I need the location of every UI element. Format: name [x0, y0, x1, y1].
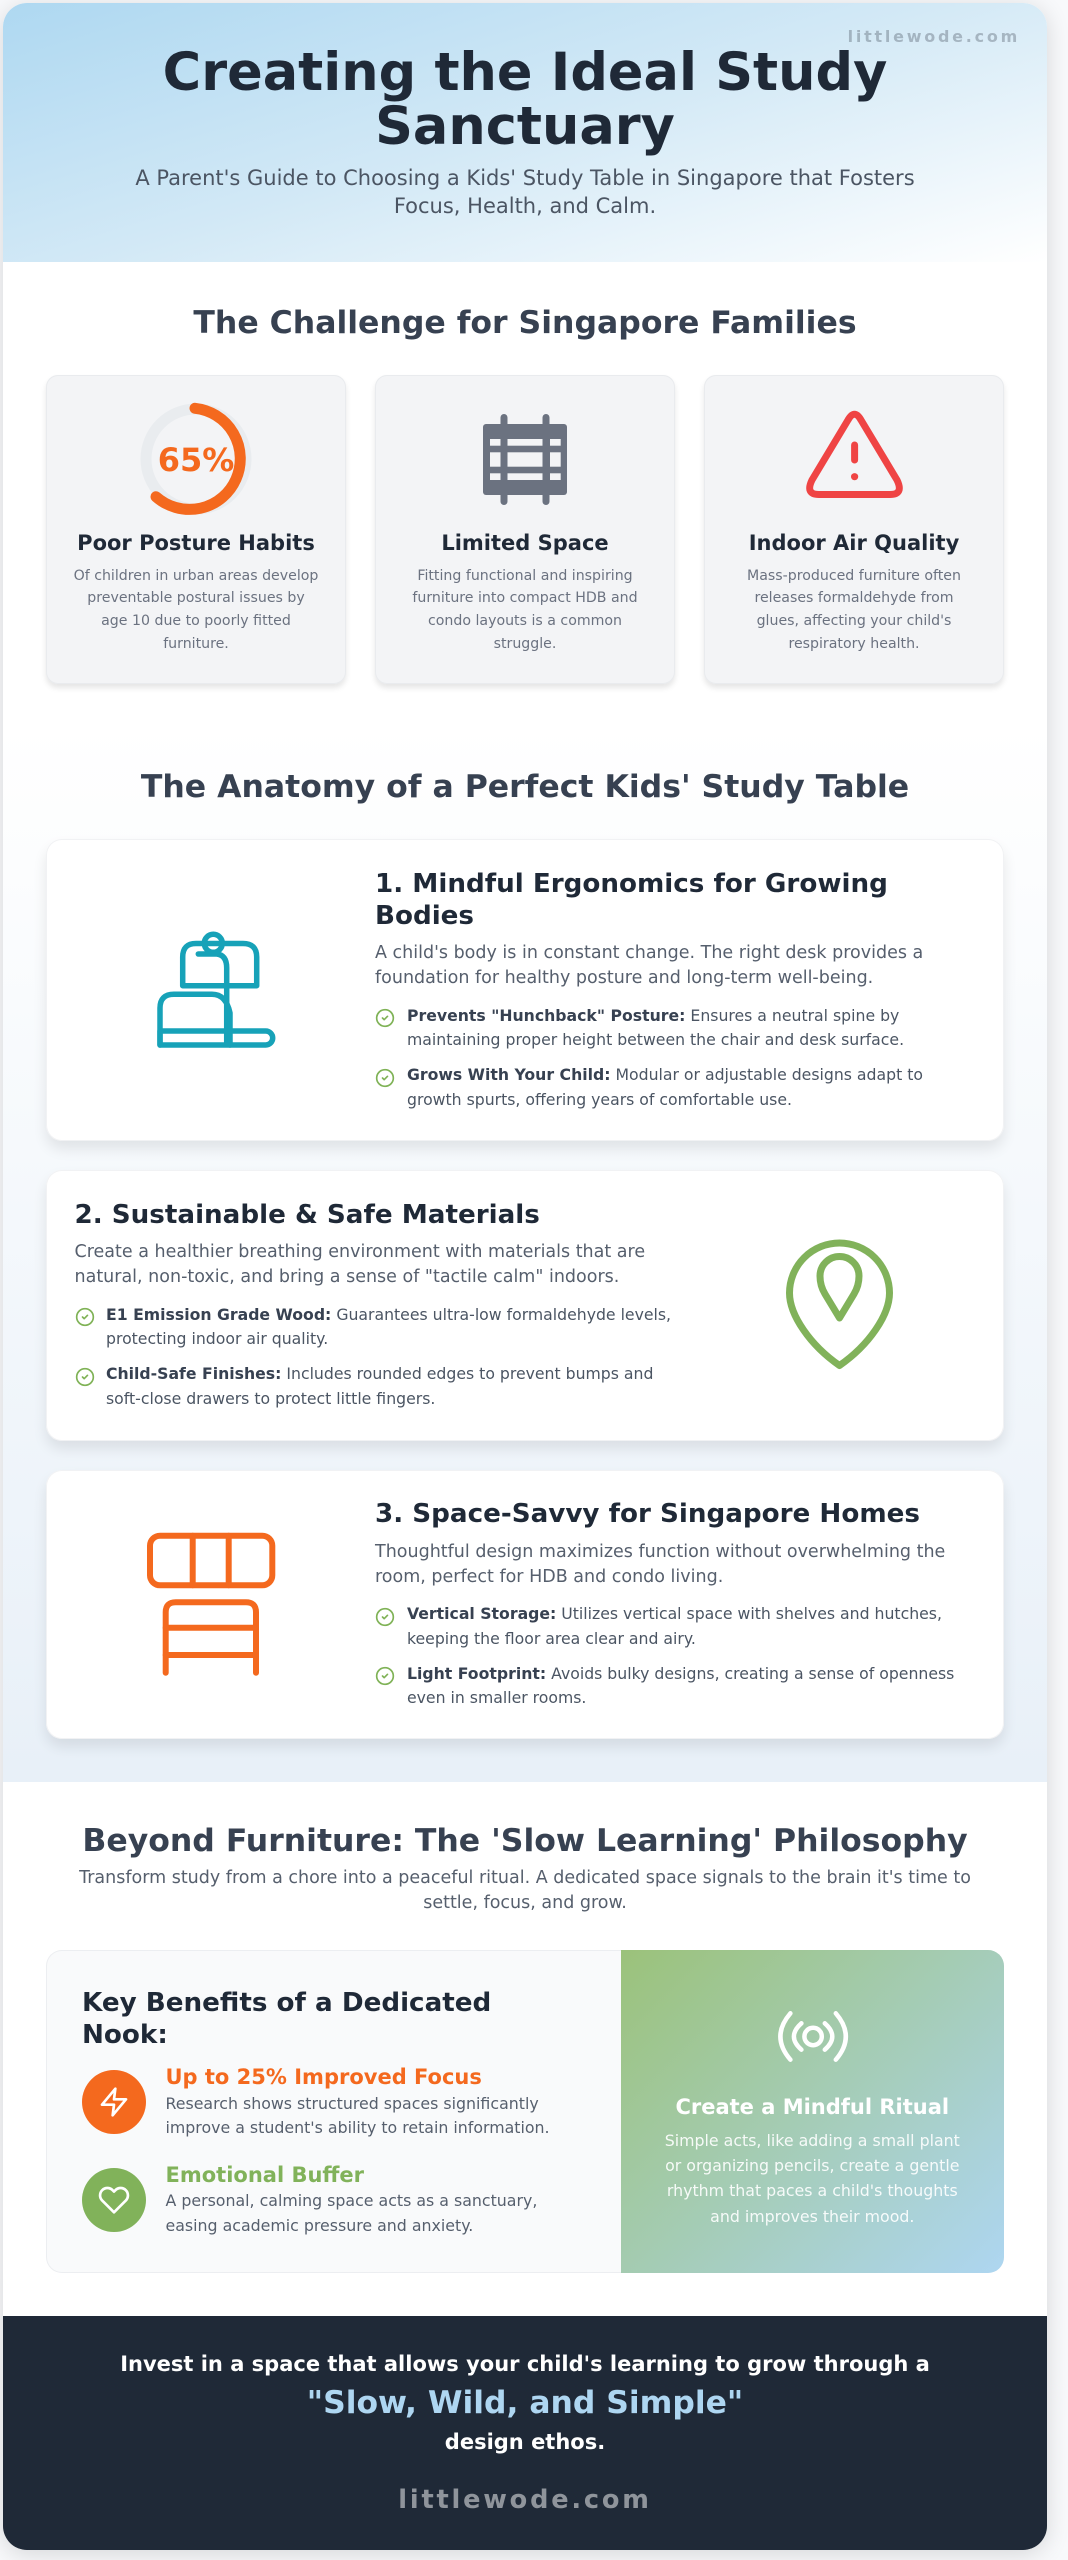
- feature title: 1. Mindful Ergonomics for Growing: [375, 868, 888, 898]
- subtitle: Focus, Health, and Calm.: [394, 194, 656, 218]
- card text: age 10 due to poorly fitted: [101, 613, 291, 629]
- benefit title: emotional buffer: Emotional Buffer: [166, 2162, 364, 2186]
- bullet: child-safe finishes: soft-close drawers to protect little fingers.: [106, 1389, 435, 1408]
- title: [163, 42, 887, 156]
- panel: poor posture habits: [46, 375, 346, 684]
- icon: check: [376, 1666, 394, 1686]
- card text: [747, 568, 961, 652]
- section: the challenge: [3, 262, 1047, 724]
- ritual text: Simple acts, like adding a small plant: [665, 2131, 960, 2150]
- panel: indoor air quality: [704, 375, 1004, 684]
- icon: check: [76, 1368, 94, 1386]
- card title: Poor Posture Habits: [77, 531, 315, 555]
- footer banner: [3, 2316, 1047, 2550]
- card title: Limited Space: [441, 531, 609, 555]
- icon: lightning bolt: [82, 2070, 146, 2134]
- heading: anatomy: The Anatomy of a Perfect Kids' Study Table: [141, 769, 909, 805]
- header banner: [3, 3, 1047, 262]
- heading: key benefits: Key Benefits of a Dedicated: [82, 1988, 491, 2018]
- bullet: grows with child: [407, 1065, 923, 1109]
- icon: check: [376, 1608, 394, 1626]
- bullet: light footprint: Light Footprint: Avoids bulky designs, creating a sense of openness: [407, 1664, 954, 1683]
- feature title: 3. Space-Savvy for Singapore Homes: [375, 1499, 920, 1529]
- panel: limited space: [375, 375, 675, 684]
- footer line two: design ethos.: [445, 2430, 605, 2454]
- intro text: [79, 1868, 971, 1912]
- card text: furniture into compact HDB and: [412, 590, 638, 606]
- ritual text: or organizing pencils, create a gentle: [665, 2156, 959, 2175]
- card text: glues, affecting your child's: [757, 613, 951, 629]
- intro text: Transform study from a chore into a peaceful ritual. A dedicated space signals to the brain it's time to: [79, 1868, 971, 1888]
- icon: desk and chair: [157, 932, 276, 1048]
- bullet: E1 wood: E1 Emission Grade Wood: Guarantees ultra-low formaldehyde levels,: [106, 1305, 671, 1324]
- icon: check: [376, 1008, 394, 1028]
- panel: benefits and ritual: [46, 1950, 1004, 2273]
- card text: releases formaldehyde from: [754, 590, 954, 606]
- card text: struggle.: [494, 636, 556, 652]
- feature title: 2. Sustainable & Safe Materials: [74, 1200, 540, 1230]
- benefit text: emotional buffer: easing academic pressure and anxiety.: [166, 2216, 473, 2234]
- panel: ergonomics: [46, 839, 1004, 1141]
- feature description: natural, non-toxic, and bring a sense of "tactile calm" indoors.: [74, 1267, 619, 1287]
- watermark: littlewode.com: [848, 27, 1020, 46]
- ritual text: and improves their mood.: [710, 2207, 914, 2226]
- feature description: room, perfect for HDB and condo living.: [375, 1566, 723, 1586]
- icon: check: [76, 1308, 94, 1326]
- footer brand: littlewode.com: [398, 2485, 652, 2515]
- bullet: E1 wood: [106, 1305, 671, 1348]
- ritual text: rhythm that paces a child's thoughts: [667, 2181, 958, 2200]
- heading: philosophy: Beyond Furniture: The 'Slow Learning' Philosophy: [82, 1823, 968, 1859]
- title: Creating the Ideal Study: [163, 42, 887, 102]
- feature title: Bodies: [375, 900, 474, 930]
- intro text: settle, focus, and grow.: [423, 1892, 627, 1912]
- benefit title: focus: Up to 25% Improved Focus: [166, 2064, 482, 2088]
- ritual title: Create a Mindful Ritual: [675, 2095, 949, 2119]
- card text: Fitting functional and inspiring: [417, 568, 633, 584]
- icon: check: [376, 1068, 394, 1088]
- feature description: [375, 942, 923, 988]
- footer highlight: "Slow, Wild, and Simple": [307, 2385, 743, 2421]
- feature description: Create a healthier breathing environment with materials that are: [74, 1242, 645, 1262]
- card text: condo layouts is a common: [428, 613, 622, 629]
- card text: respiratory health.: [788, 636, 920, 652]
- section: anatomy of a perfect table: [3, 724, 1047, 1782]
- chart: 65 percent ring: [140, 402, 252, 515]
- stat: 65%: 65%: [158, 441, 234, 479]
- heading: challenge: The Challenge for Singapore Families: [193, 304, 857, 340]
- footer line one: Invest in a space that allows your child's learning to grow through a: [120, 2352, 930, 2376]
- benefit text: emotional buffer: [166, 2191, 537, 2234]
- section: slow learning philosophy: [3, 1782, 1047, 2316]
- feature description: [374, 1542, 945, 1586]
- icon: shelves and desk: [147, 1532, 276, 1676]
- feature description: Thoughtful design maximizes function without overwhelming the: [375, 1542, 945, 1562]
- card text: preventable postural issues by: [87, 590, 305, 606]
- heading: key benefits: [82, 1988, 491, 2050]
- icon: warning triangle: [806, 410, 903, 498]
- heading: key benefits: Nook:: [82, 2020, 168, 2050]
- bullet: child-safe finishes: Child-Safe Finishes: Includes rounded edges to prevent bumps and: [106, 1364, 653, 1383]
- bullet: grows with child: Grows With Your Child: Modular or adjustable designs adapt to: [407, 1065, 923, 1084]
- bullet: light footprint: even in smaller rooms.: [407, 1688, 586, 1707]
- bullet: hunchback posture: Prevents "Hunchback" Posture: Ensures a neutral spine by: [407, 1006, 899, 1025]
- feature description: [74, 1242, 645, 1287]
- subtitle: [135, 166, 915, 218]
- panel: materials: [46, 1170, 1004, 1441]
- feature description: foundation for healthy posture and long-term well-being.: [375, 968, 873, 988]
- bullet: vertical storage: [407, 1604, 942, 1648]
- bullet: vertical storage: Vertical Storage: Utilizes vertical space with shelves and hutches,: [407, 1604, 942, 1623]
- benefit text: focus: [166, 2094, 550, 2137]
- bullet: child-safe finishes: [106, 1364, 653, 1408]
- bullet: hunchback posture: [407, 1006, 904, 1049]
- icon: grid layout: [483, 414, 567, 505]
- benefit text: focus: Research shows structured spaces significantly: [166, 2094, 539, 2112]
- icon: heart: [82, 2168, 146, 2232]
- card title: Indoor Air Quality: [749, 531, 959, 555]
- bullet: vertical storage: keeping the floor area clear and airy.: [407, 1629, 696, 1648]
- panel: space-savvy: [46, 1470, 1004, 1739]
- card text: furniture.: [163, 636, 229, 652]
- card text: Mass-produced furniture often: [747, 568, 961, 584]
- bullet: hunchback posture: maintaining proper height between the chair and desk surface.: [407, 1030, 904, 1049]
- panel: mindful ritual: [621, 1950, 1004, 2273]
- subtitle: A Parent's Guide to Choosing a Kids' Study Table in Singapore that Fosters: [135, 166, 915, 190]
- bullet: grows with child: growth spurts, offering years of comfortable use.: [407, 1090, 792, 1109]
- card text: [412, 568, 638, 652]
- card text: Of children in urban areas develop: [74, 568, 318, 584]
- feature title: [375, 868, 888, 930]
- benefit text: emotional buffer: A personal, calming space acts as a sanctuary,: [166, 2191, 537, 2210]
- title: Sanctuary: [375, 96, 675, 156]
- feature description: A child's body is in constant change. The right desk provides a: [375, 942, 923, 962]
- ritual text: [665, 2131, 960, 2226]
- icon: radio waves: [778, 2011, 848, 2062]
- card text: [74, 568, 318, 652]
- icon: leaf pin: [786, 1240, 893, 1370]
- bullet: E1 wood: protecting indoor air quality.: [106, 1329, 328, 1348]
- bullet: light footprint: [407, 1664, 954, 1707]
- benefit text: focus: improve a student's ability to retain information.: [166, 2118, 550, 2137]
